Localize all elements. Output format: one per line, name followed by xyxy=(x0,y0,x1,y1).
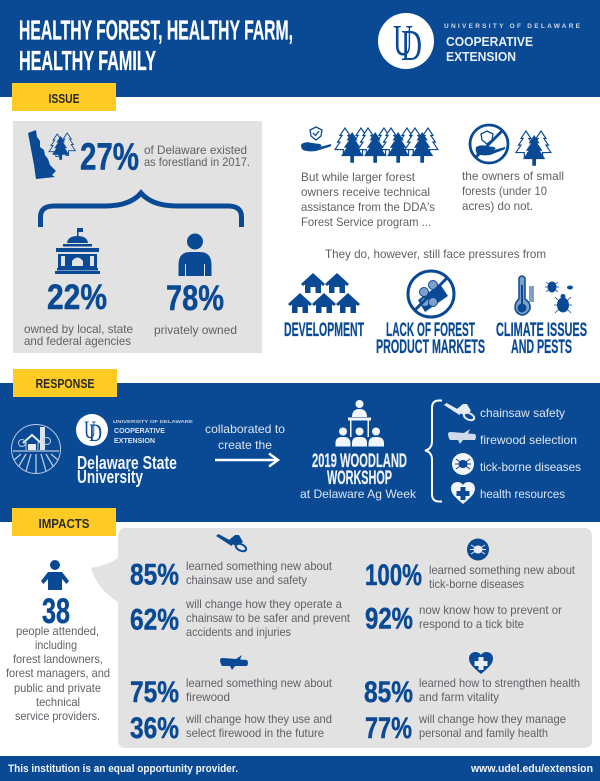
icon: no assistance xyxy=(470,125,508,163)
stat: 75 percent firewood xyxy=(130,676,333,709)
text: forestland share: of Delaware existed xyxy=(144,143,247,157)
text: at Delaware Ag Week: at Delaware Ag Week xyxy=(300,487,417,501)
stat: 85 percent chainsaw: chainsaw use and safety xyxy=(186,573,307,587)
label: climate issues and pests xyxy=(496,320,587,358)
text: collaborated to create the: collaborated to xyxy=(205,422,285,436)
label: firewood selection: firewood selection xyxy=(480,433,577,447)
stat: 36 percent firewood: will change how they use and xyxy=(185,712,332,726)
stat: 100 percent ticks: learned something new about xyxy=(429,563,576,577)
stat: 62 percent chainsaw xyxy=(130,597,351,639)
stat: 100 percent ticks: 100% xyxy=(365,559,422,592)
stat: 92 percent ticks: 92% xyxy=(365,602,413,636)
section tab: response: RESPONSE xyxy=(36,376,95,391)
stat: 85 percent health: learned how to strengthen health xyxy=(419,676,580,690)
text: private ownership: privately owned xyxy=(154,323,237,337)
icon: tick xyxy=(452,453,474,475)
heading: 2019 Woodland Workshop: 2019 WOODLAND xyxy=(312,451,407,472)
text: attendees description: technical xyxy=(36,695,80,709)
stat: 100 percent ticks: tick-borne diseases xyxy=(429,577,524,591)
text: forestland share xyxy=(144,143,250,169)
text: small forest owners xyxy=(462,169,564,213)
icon: tick impacts xyxy=(467,538,489,560)
heading: 2019 Woodland Workshop: WORKSHOP xyxy=(327,468,392,489)
logo: UD Cooperative Extension: UNIVERSITY OF DELAWARE xyxy=(113,419,193,424)
icon: health heart xyxy=(451,482,475,504)
text: larger forest owners: owners receive technical xyxy=(301,185,430,199)
panel: response band xyxy=(0,383,600,522)
label: lack of forest product markets: PRODUCT MARKETS xyxy=(376,337,485,358)
icon: small forest xyxy=(516,131,551,166)
icon: government building xyxy=(55,228,100,274)
icon: helping hand with shield xyxy=(301,127,331,151)
logo: Delaware State University: University xyxy=(77,466,144,487)
stat: 92 percent ticks: now know how to prevent or xyxy=(419,603,562,617)
section tab: impacts xyxy=(12,508,116,536)
stat: 62 percent chainsaw: chainsaw to be safer and prevent xyxy=(186,611,351,625)
text: attendees description: people attended, xyxy=(16,624,99,638)
stat: 85 percent health xyxy=(364,676,580,709)
stat: 75 percent firewood: learned something new about xyxy=(186,676,333,690)
logo: UD Cooperative Extension: COOPERATIVE xyxy=(114,426,165,435)
University of Delaware Cooperative Extension logo: U xyxy=(393,16,413,65)
stat: 77 percent health: will change how they manage xyxy=(418,712,566,726)
section tab: issue: ISSUE xyxy=(48,91,80,106)
stat: 92 percent ticks xyxy=(365,602,562,636)
section tab: impacts: IMPACTS xyxy=(38,516,90,531)
stat: 77 percent health: 77% xyxy=(365,712,412,745)
icon: large forest xyxy=(335,128,438,163)
University of Delaware Cooperative Extension logo: UNIVERSITY OF DELAWARE xyxy=(444,23,581,30)
stat: 85 percent health: 85% xyxy=(364,676,413,709)
text: public ownership: and federal agencies xyxy=(24,334,131,348)
text: small forest owners: the owners of small xyxy=(462,169,564,183)
icon: chainsaw xyxy=(444,403,475,422)
text: larger forest owners: But while larger forest xyxy=(301,170,416,184)
text: collaborated to create the: create the xyxy=(218,438,272,452)
icon: workshop podium xyxy=(336,400,384,446)
stat: 85 percent chainsaw: 85% xyxy=(130,558,179,592)
icon: no logs xyxy=(408,271,454,317)
logo: UD Cooperative Extension: U xyxy=(84,417,96,444)
label: chainsaw safety: chainsaw safety xyxy=(480,406,565,420)
logo: Delaware State University: Delaware State xyxy=(77,452,177,473)
stat: 92 percent ticks: respond to a tick bite xyxy=(419,617,524,631)
logo: UD Cooperative Extension: EXTENSION xyxy=(114,436,155,445)
University of Delaware Cooperative Extension logo xyxy=(378,13,581,70)
title xyxy=(19,14,293,76)
panel: impact results bubble xyxy=(91,528,592,748)
section tab: issue xyxy=(12,83,116,111)
label: health resources: health resources xyxy=(480,487,565,501)
icon: thermometer and pests xyxy=(515,276,573,315)
brace xyxy=(40,193,242,227)
stat: 85 percent chainsaw: learned something new about xyxy=(186,559,333,573)
text: attendees description: service providers. xyxy=(15,709,100,723)
footer: website: www.udel.edu/extension xyxy=(470,763,593,775)
text: small forest owners: forests (under 10 xyxy=(462,184,547,198)
logo: UD Cooperative Extension: D xyxy=(89,420,102,447)
stat: 36 percent firewood: select firewood in the future xyxy=(186,726,324,740)
text: forestland share: as forestland in 2017. xyxy=(144,155,250,169)
stat: 27 percent: 27% xyxy=(80,136,139,178)
panel: forest ownership xyxy=(13,121,262,353)
icon: firewood xyxy=(448,429,476,444)
icon: farm seal xyxy=(12,424,60,474)
text: attendees description xyxy=(6,624,110,723)
stat: 75 percent firewood: 75% xyxy=(130,676,179,709)
label: tick-borne diseases: tick-borne diseases xyxy=(480,460,581,474)
label: development: DEVELOPMENT xyxy=(284,320,364,341)
stat: 77 percent health: personal and family health xyxy=(419,726,548,740)
label: lack of forest product markets xyxy=(376,320,485,358)
stat: 22 percent: 22% xyxy=(47,278,107,317)
icon: firewood impacts xyxy=(220,655,248,670)
text: larger forest owners: Forest Service program ... xyxy=(301,215,431,229)
icon: houses xyxy=(288,273,360,313)
icon: person xyxy=(178,234,212,276)
stat: 62 percent chainsaw: 62% xyxy=(130,604,179,636)
text: pressures intro: They do, however, still face pressures from xyxy=(325,247,546,261)
University of Delaware Cooperative Extension logo: EXTENSION xyxy=(446,50,516,64)
stat: 78 percent: 78% xyxy=(166,279,224,318)
title: HEALTHY FOREST, HEALTHY FARM, xyxy=(19,14,293,46)
icon: chainsaw impacts xyxy=(216,534,247,553)
text: attendees description: including xyxy=(35,638,77,652)
University of Delaware Cooperative Extension logo: D xyxy=(401,21,422,70)
text: small forest owners: acres) do not. xyxy=(462,199,533,213)
icon: forest trees xyxy=(49,133,75,160)
text: public ownership: owned by local, state xyxy=(24,322,133,336)
header band xyxy=(0,0,600,97)
text: attendees description: public and private xyxy=(14,681,101,695)
University of Delaware Cooperative Extension logo: COOPERATIVE xyxy=(446,35,533,49)
logo: UD Cooperative Extension xyxy=(76,414,193,447)
icon: heart impacts xyxy=(469,652,493,674)
footer: equal opportunity statement: This institution is an equal opportunity provider. xyxy=(8,763,238,775)
logo: Delaware State University xyxy=(77,452,177,487)
text: larger forest owners xyxy=(301,170,435,229)
brace: workshop topics xyxy=(425,400,442,502)
icon: attendee xyxy=(41,560,69,590)
stat: 77 percent health xyxy=(365,712,566,745)
stat: 75 percent firewood: firewood xyxy=(186,690,230,704)
stat: 62 percent chainsaw: will change how they operate a xyxy=(185,597,342,611)
arrow xyxy=(215,454,278,466)
icon: Delaware map xyxy=(28,130,56,179)
stat: 62 percent chainsaw: accidents and injuries xyxy=(186,625,291,639)
text: attendees description: forest landowners, xyxy=(13,652,103,666)
stat: 85 percent health: and farm vitality xyxy=(419,690,499,704)
heading: 2019 Woodland Workshop xyxy=(312,451,407,489)
text: larger forest owners: assistance from the DDA's xyxy=(301,200,435,214)
text: public ownership xyxy=(24,322,133,348)
text: attendees description: forest managers, and xyxy=(6,666,110,680)
stat: 38 attendees: 38 xyxy=(42,592,70,631)
stat: 85 percent chainsaw xyxy=(130,558,333,592)
stat: 36 percent firewood: 36% xyxy=(130,712,179,745)
title: HEALTHY FAMILY xyxy=(19,45,156,76)
text: collaborated to create the xyxy=(205,422,285,452)
stat: 36 percent firewood xyxy=(130,712,332,745)
label: lack of forest product markets: LACK OF FOREST xyxy=(386,320,475,341)
section tab: response xyxy=(13,369,117,397)
footer xyxy=(0,756,600,781)
stat: 100 percent ticks xyxy=(365,559,576,592)
